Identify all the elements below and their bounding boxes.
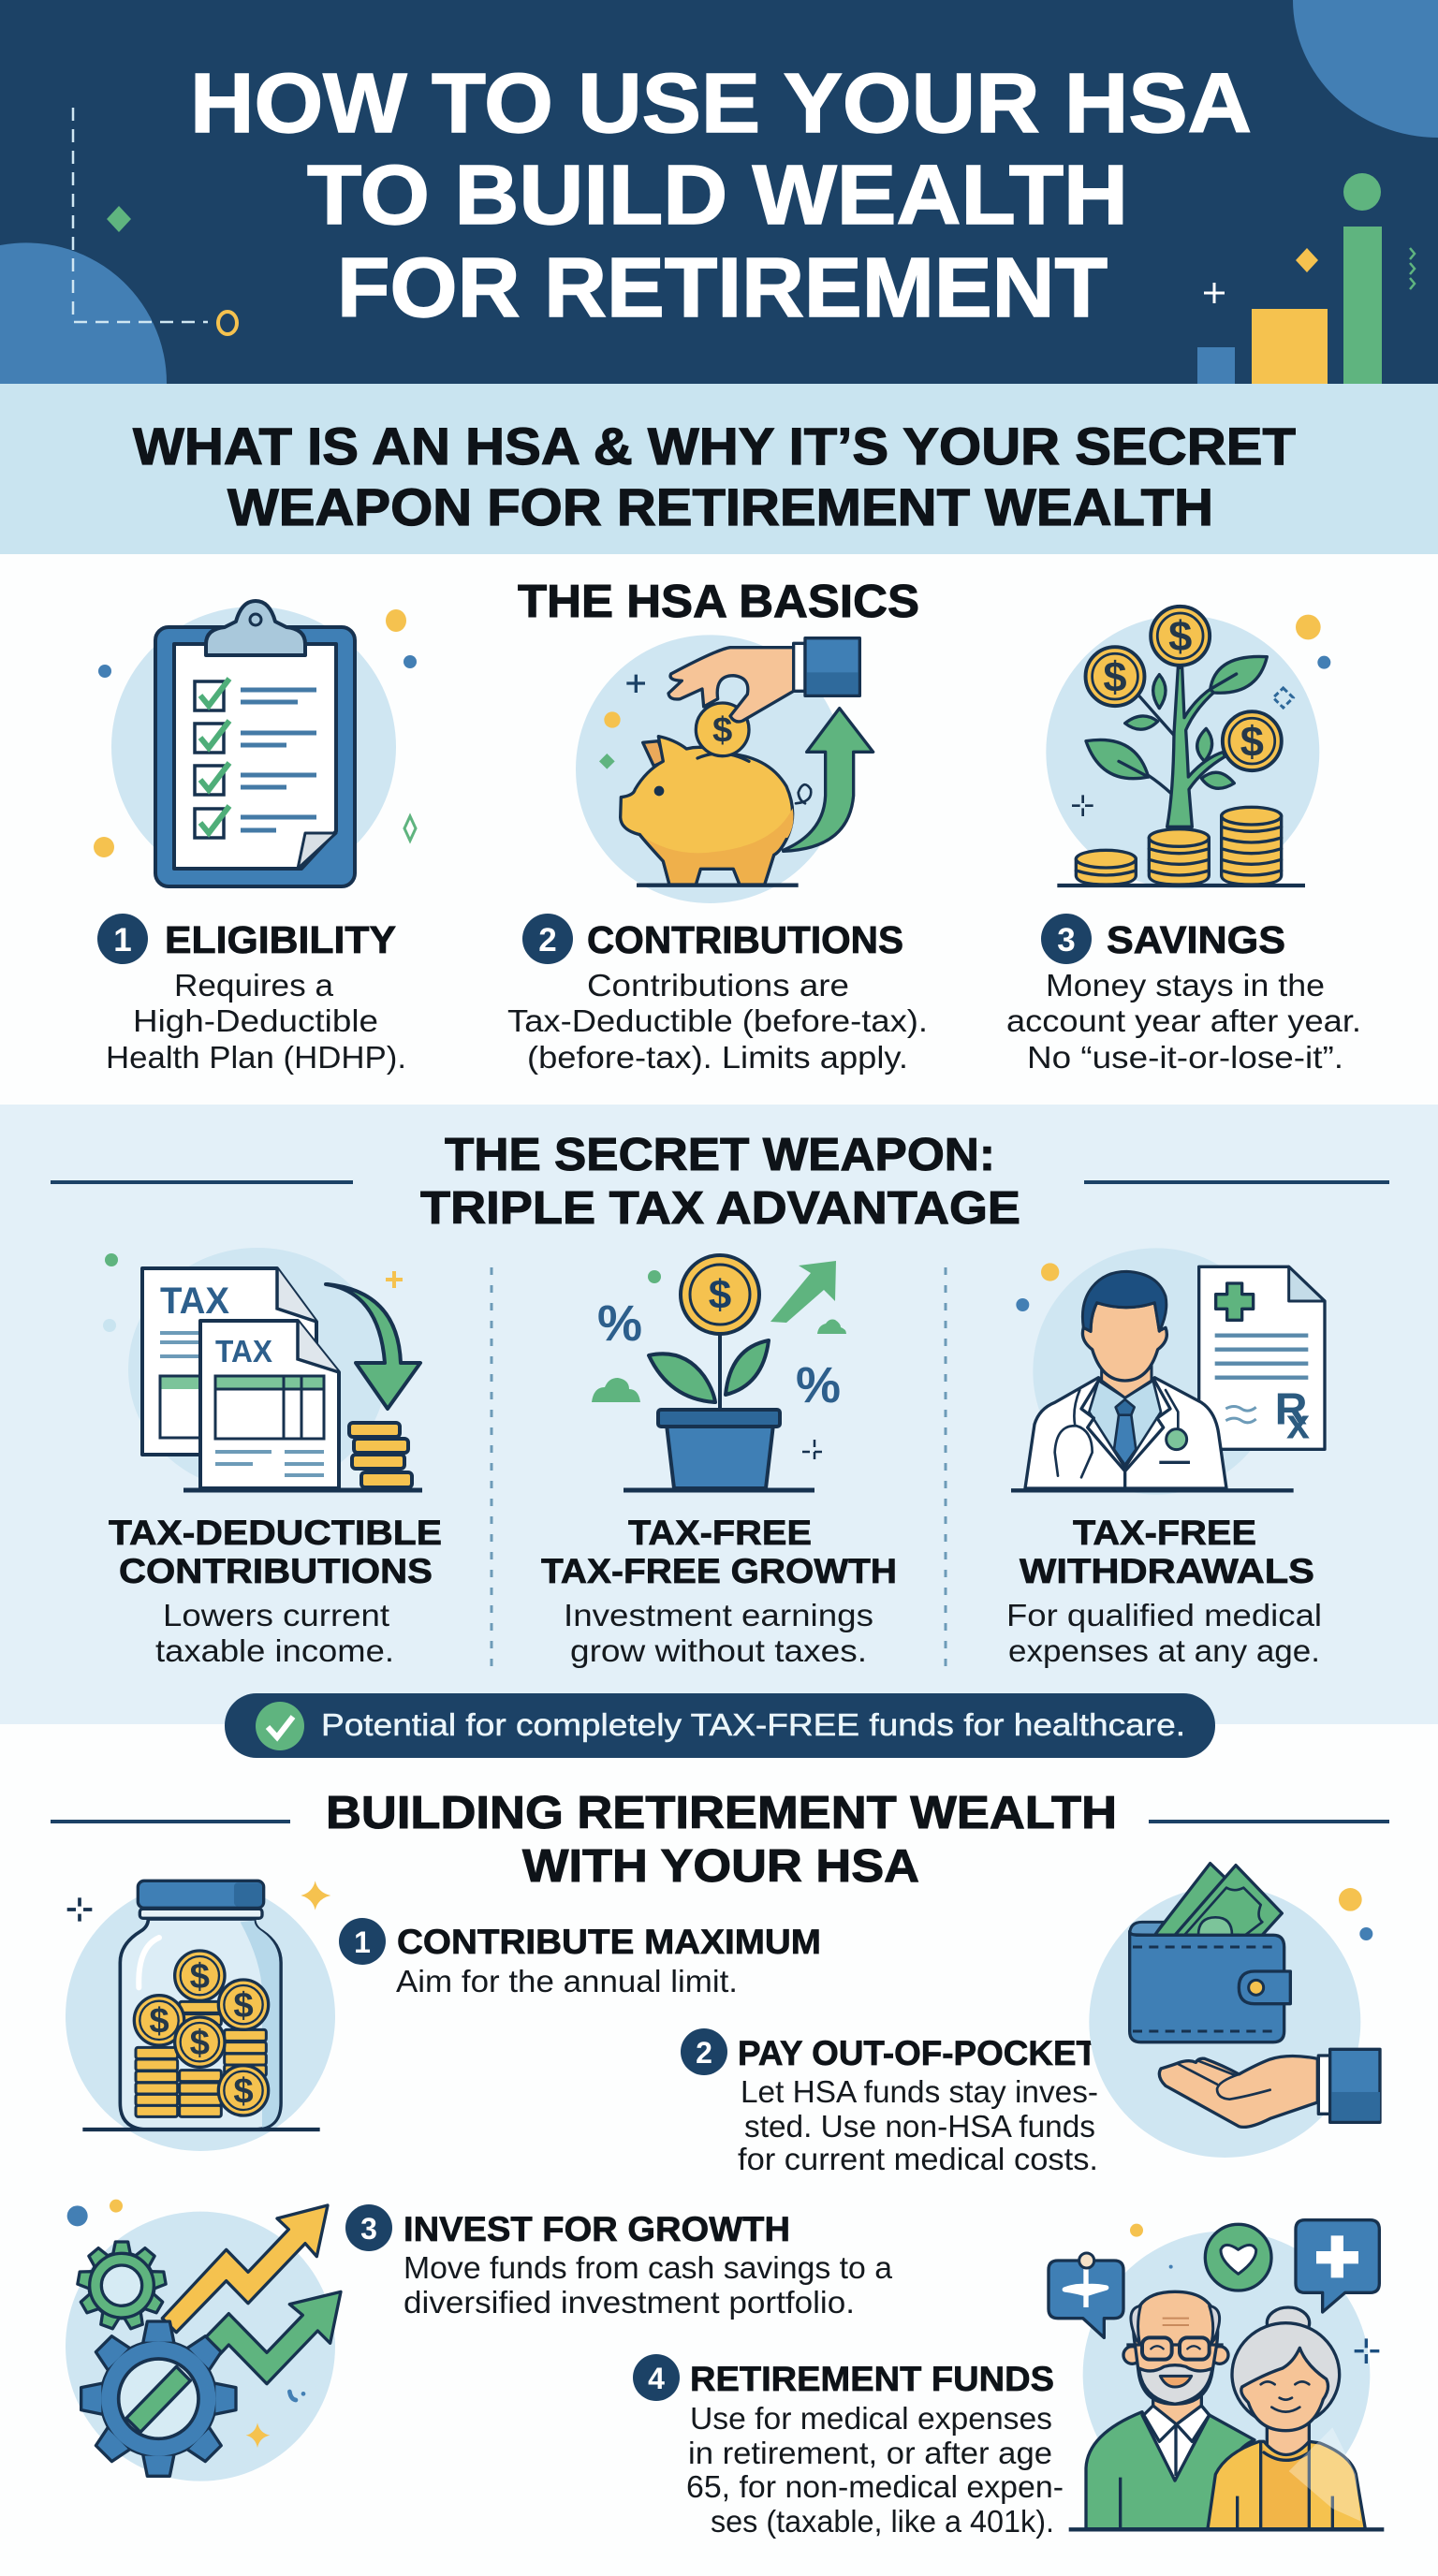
step 4: 65, for non-medical expen- (686, 2469, 1064, 2504)
benefit: deductible (109, 1514, 442, 1668)
benefit: withdrawals: TAX-FREE (1073, 1514, 1256, 1552)
heading: THE HSA BASICS (518, 577, 919, 627)
item: savings: account year after year. (1006, 1003, 1361, 1038)
step 4: ses (taxable, like a 401k). (711, 2504, 1054, 2539)
step 1: CONTRIBUTE MAXIMUM (397, 1923, 821, 1961)
step 2: for current medical costs. (738, 2142, 1098, 2176)
item: eligibility: Requires a (174, 968, 334, 1003)
panel: building retirement wealth (51, 1788, 1389, 2539)
heading: WITH YOUR HSA (522, 1841, 919, 1892)
step 3 (345, 2204, 893, 2320)
heading: BUILDING RETIREMENT WEALTH (326, 1788, 1117, 1838)
icon: coin jar: $ (233, 1985, 254, 2026)
panel: the HSA basics (94, 577, 1361, 1075)
callout pill: Potential for completely TAX-FREE funds for healthcare. (321, 1707, 1185, 1742)
benefit: deductible: Lowers current (163, 1598, 389, 1632)
item: savings: Money stays in the (1046, 968, 1325, 1003)
icon: plant with coin: % (796, 1357, 841, 1413)
icon: gears and growth arrows (66, 2200, 341, 2481)
item: contributions: CONTRIBUTIONS (587, 918, 903, 961)
icon: plant with coin (592, 1255, 846, 1490)
icon: retired couple (1049, 2220, 1384, 2529)
panel: header (0, 0, 1438, 386)
item: contributions: Contributions are (587, 968, 849, 1003)
step 4: 4 (648, 2362, 665, 2395)
panel: subtitle band: WHAT IS AN HSA & WHY IT’S YOUR SECRET (133, 417, 1296, 476)
icon: doctor with prescription: R (1275, 1384, 1308, 1435)
icon: piggy bank (576, 635, 873, 903)
title: FOR RETIREMENT (337, 242, 1108, 335)
icon: wallet and hand (1089, 1864, 1380, 2158)
icon: money tree: $ (1168, 612, 1192, 660)
step 3: 3 (360, 2212, 377, 2246)
item: savings: 3 (1057, 922, 1076, 959)
step 1: Aim for the annual limit. (396, 1964, 738, 1998)
step 4: RETIREMENT FUNDS (690, 2360, 1054, 2398)
title: HOW TO USE YOUR HSA (190, 57, 1252, 151)
benefit: withdrawals (1006, 1514, 1322, 1668)
step 2: 2 (696, 2036, 712, 2070)
icon: coin jar: $ (190, 1956, 210, 1997)
item: eligibility: Health Plan (HDHP). (106, 1040, 406, 1075)
item: contributions: 2 (538, 922, 557, 959)
icon: tax documents (103, 1248, 422, 1491)
item: savings (1006, 914, 1361, 1075)
benefit: withdrawals: expenses at any age. (1008, 1633, 1320, 1668)
heading: TRIPLE TAX ADVANTAGE (420, 1183, 1020, 1234)
item: savings: No “use-it-or-lose-it”. (1027, 1040, 1343, 1075)
step 3: Move funds from cash savings to a (404, 2250, 893, 2285)
icon: clipboard (94, 601, 417, 887)
icon: tax documents: TAX (215, 1334, 272, 1368)
step 2: Let HSA funds stay inves- (741, 2074, 1098, 2109)
benefit: deductible: TAX-DEDUCTIBLE (109, 1514, 442, 1552)
heading (51, 1130, 1389, 1234)
heading: THE SECRET WEAPON: (445, 1130, 995, 1180)
icon: money tree: $ (1240, 717, 1264, 765)
icon: doctor with prescription: x (1286, 1400, 1310, 1448)
step 4: in retirement, or after age (688, 2436, 1052, 2470)
icon: money tree (1046, 607, 1330, 888)
panel: subtitle band: WEAPON FOR RETIREMENT WEALTH (227, 477, 1213, 536)
step 2: sted. Use non-HSA funds (744, 2109, 1095, 2144)
item: contributions (507, 914, 928, 1075)
step 3: INVEST FOR GROWTH (404, 2210, 790, 2248)
item: eligibility: High-Deductible (133, 1003, 378, 1038)
benefit: growth: TAX-FREE (628, 1514, 812, 1552)
step 4 (633, 2354, 1064, 2539)
item: savings: SAVINGS (1107, 918, 1285, 961)
panel: triple tax advantage (0, 1105, 1438, 1724)
callout pill (225, 1693, 1215, 1758)
icon: plant with coin: % (597, 1295, 642, 1352)
item: contributions: (before-tax). Limits apply. (527, 1040, 908, 1075)
icon: doctor with prescription (1011, 1248, 1325, 1495)
title: TO BUILD WEALTH (307, 149, 1128, 242)
step 1 (339, 1918, 821, 1998)
benefit: withdrawals: WITHDRAWALS (1020, 1552, 1314, 1590)
icon: growth bars (1197, 173, 1415, 386)
step 4: Use for medical expenses (690, 2401, 1052, 2436)
item: eligibility (97, 914, 406, 1075)
step 3: diversified investment portfolio. (404, 2285, 855, 2320)
icon: coin jar: $ (233, 2071, 254, 2112)
title (190, 57, 1252, 335)
benefit: withdrawals: For qualified medical (1006, 1598, 1322, 1632)
icon: coin jar (66, 1881, 335, 2151)
step 2: PAY OUT-OF-POCKET (738, 2034, 1097, 2072)
icon: coin jar: $ (190, 2023, 210, 2063)
step 1: 1 (354, 1925, 371, 1959)
panel: subtitle band (0, 384, 1438, 554)
benefit: deductible: taxable income. (155, 1633, 394, 1668)
icon: piggy bank: $ (712, 710, 732, 751)
heading (51, 1788, 1389, 1892)
icon: coin jar: $ (149, 2001, 169, 2042)
item: eligibility: 1 (113, 922, 132, 959)
item: eligibility: ELIGIBILITY (165, 918, 396, 961)
benefit: deductible: CONTRIBUTIONS (119, 1552, 433, 1590)
icon: tax documents: TAX (160, 1281, 229, 1322)
step 2 (681, 2028, 1098, 2176)
icon: money tree: $ (1103, 652, 1127, 700)
benefit: growth: Investment earnings (564, 1598, 873, 1632)
item: contributions: Tax-Deductible (before-tax). (507, 1003, 928, 1038)
benefit: growth (541, 1514, 897, 1668)
benefit: growth: TAX-FREE GROWTH (541, 1552, 897, 1590)
icon: plant with coin: $ (709, 1272, 731, 1318)
benefit: growth: grow without taxes. (570, 1633, 867, 1668)
